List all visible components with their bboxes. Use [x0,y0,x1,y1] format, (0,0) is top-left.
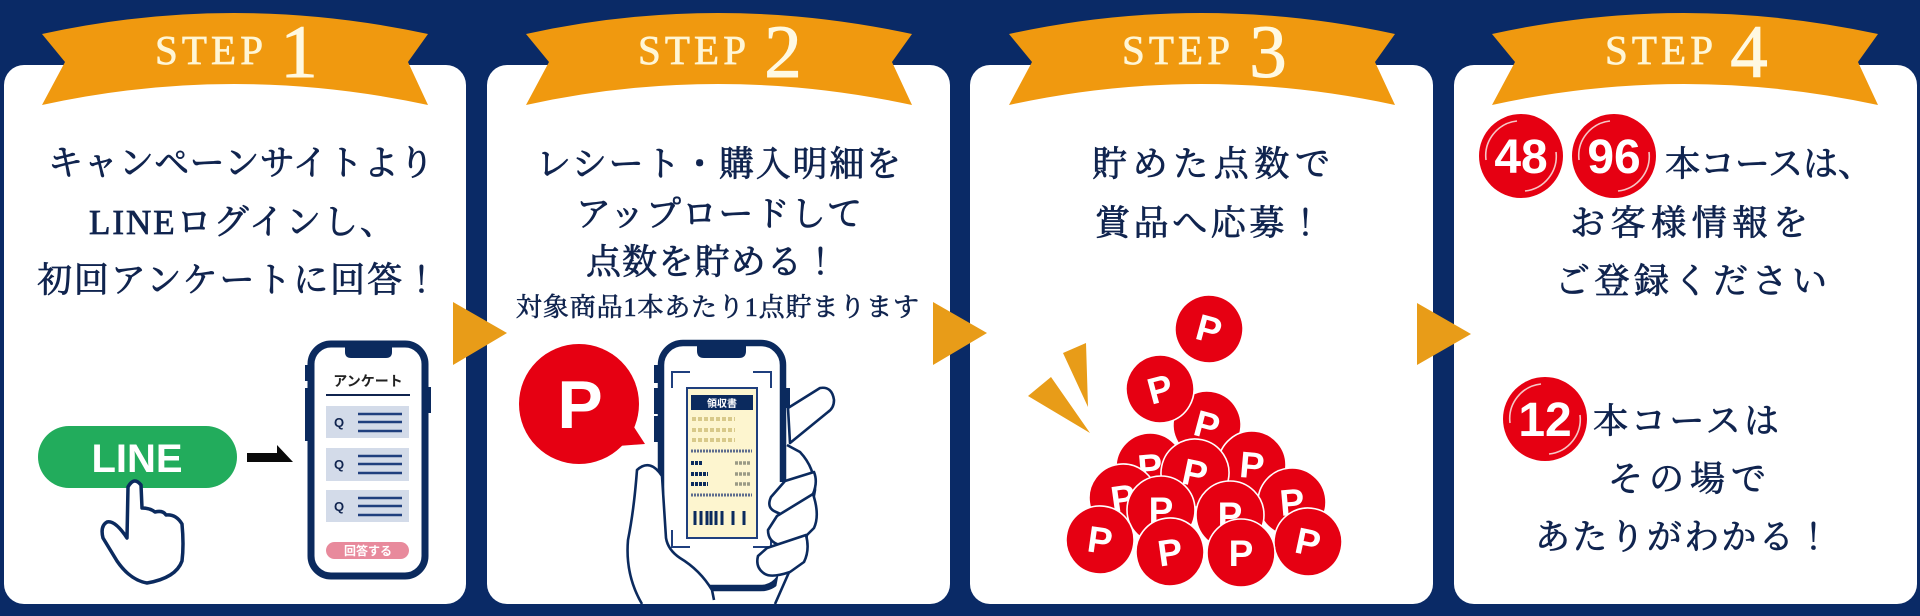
coin pile: P [1085,518,1115,563]
step 1 text [37,144,439,300]
step 1 number: 1 [280,11,318,94]
panel: step 1 [4,11,466,604]
step 2 text: 対象商品1本あたり1点貯まります [516,293,919,322]
panel: step 4 [1454,11,1917,604]
phone: survey screen: Q [334,415,344,430]
panel: step 3 [970,11,1433,604]
step 2 label: STEP [638,27,746,73]
phone: survey screen: 回答する [344,543,392,558]
step 4 upper text [1555,145,1873,301]
coin pile: P [1143,366,1177,412]
scan frame [672,372,771,547]
step 2 number: 2 [764,11,802,94]
panel 1 card [4,65,466,604]
step 3 text: 貯めた点数で [1092,145,1330,184]
coin pile: P [1218,495,1242,536]
step 2 text: 点数を貯める！ [586,243,838,282]
panel 4 card [1454,65,1917,604]
coin pile: P [1238,444,1266,487]
phone: survey screen: アンケート [333,373,403,389]
icon: sparkle marks [1028,343,1090,433]
arrow: to survey [247,445,293,462]
coin pile [1062,287,1348,590]
icon: hand holding phone [628,388,834,604]
coin pile: P [1190,402,1224,448]
step 2 text: アップロードして [576,195,862,234]
step 3 label: STEP [1122,27,1230,73]
step 1 text: 初回アンケートに回答！ [37,261,439,300]
coin pile: P [1136,446,1164,489]
receipt [687,388,757,538]
step 1 label: STEP [155,27,263,73]
coin pile: P [1292,520,1324,565]
step 4 lower text: その場で [1608,460,1766,499]
step 4 ribbon [1492,13,1878,105]
step 4 lower text: あたりがわかる！ [1535,518,1831,557]
coin pile: P [1179,451,1211,496]
coin pile: P [1278,481,1306,524]
badge: 96 [1572,114,1656,198]
badge: 96: 96 [1587,131,1641,184]
arrow: step 1 to 2 [453,302,507,365]
panel 2 card [487,65,950,604]
step 4 upper text: ご登録ください [1555,262,1827,301]
coin pile: P [1229,533,1253,574]
step 3 text: 賞品へ応募！ [1095,204,1323,243]
speech bubble: P [519,344,645,464]
step 4 upper text: お客様情報を [1570,204,1808,243]
badge: 48: 48 [1494,131,1548,184]
phone: survey screen: Q [334,457,344,472]
step 2 text [516,145,919,322]
step 4 number: 4 [1730,11,1768,94]
phone: survey screen [305,344,431,576]
coin pile: P [1155,530,1185,575]
LINE button [38,426,237,488]
step 1 ribbon [42,13,428,105]
step 1 text: LINEログインし、 [89,203,395,242]
coin pile: P [1149,490,1173,531]
icon: pointing hand [102,481,183,583]
panel 3 card [970,65,1433,604]
step 2 text: レシート・購入明細を [536,145,901,184]
step 4 lower text [1535,402,1831,557]
phone: survey screen: Q [334,499,344,514]
step 2 ribbon [526,13,912,105]
panel: step 2 [487,11,950,604]
receipt: 領収書 [707,397,737,410]
badge: 12: 12 [1518,394,1572,447]
coin pile: P [1192,306,1226,352]
step 3 ribbon [1009,13,1395,105]
badge: 12 [1503,377,1587,461]
step 4 upper text: 本コースは、 [1665,145,1873,184]
arrow: step 3 to 4 [1417,303,1471,365]
LINE button: LINE [91,437,183,481]
step 1 text: キャンペーンサイトより [48,144,434,183]
phone: receipt scan [654,343,790,588]
step 4 label: STEP [1605,27,1713,73]
step 3 number: 3 [1249,11,1287,94]
step 3 text [1092,145,1330,243]
speech bubble: P: P [557,367,603,443]
arrow: step 2 to 3 [933,302,987,365]
badge: 48 [1479,114,1563,198]
step 4 lower text: 本コースは [1593,402,1779,441]
coin pile: P [1108,476,1138,521]
